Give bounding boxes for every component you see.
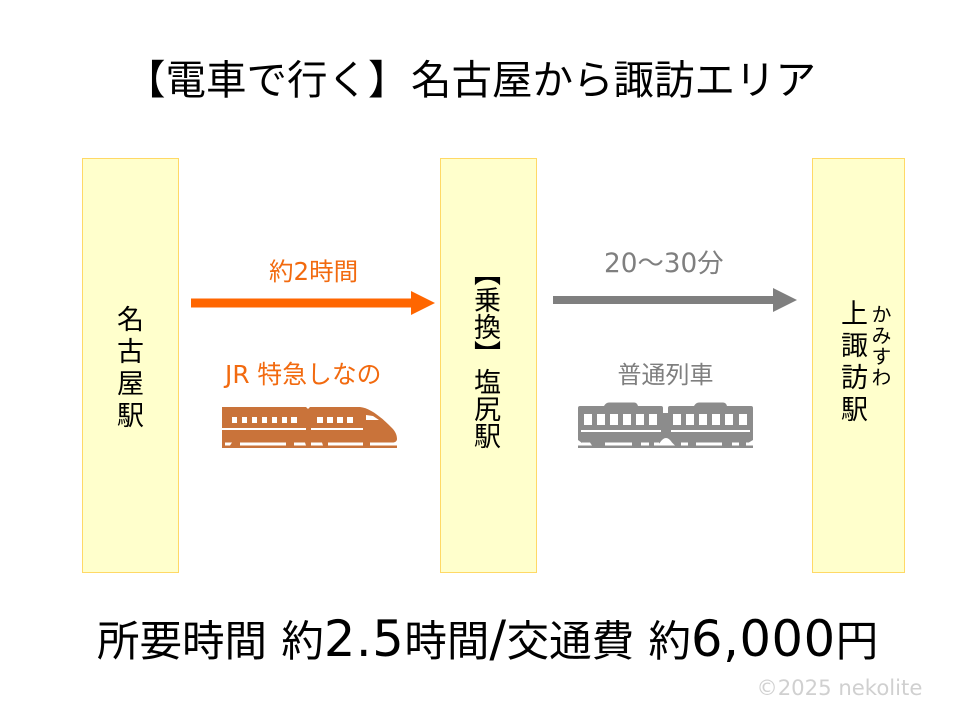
summary: total time and fare: 所要時間 約2.5時間/交通費 約6,000円	[97, 610, 878, 668]
furigana: かみすわ	[868, 304, 892, 388]
station name: Kami-Suwa: 上諏訪駅	[836, 299, 867, 427]
icon: limited express train	[222, 407, 397, 448]
station panel: Nagoya	[82, 158, 179, 573]
transfer label: 【乗換】	[469, 259, 500, 367]
title: 【電車で行く】	[125, 56, 408, 104]
station name: Nagoya: 名古屋駅	[112, 305, 143, 433]
label: JR limited express Shinano: JR 特急しなの	[225, 360, 381, 389]
copyright: ©2025 nekolite	[756, 675, 922, 700]
station panel: Shiojiri	[440, 158, 537, 573]
label: local train: 普通列車	[618, 361, 714, 389]
station panel: Kami-Suwa	[812, 158, 905, 573]
station name: Shiojiri: 塩尻駅	[469, 368, 500, 449]
label: travel time to Shiojiri: 約2時間	[269, 257, 358, 286]
title: 名古屋から諏訪エリア	[411, 56, 816, 104]
icon: local train	[578, 402, 753, 448]
label: travel time to Kami-Suwa: 20～30分	[604, 249, 724, 279]
title	[125, 56, 816, 104]
